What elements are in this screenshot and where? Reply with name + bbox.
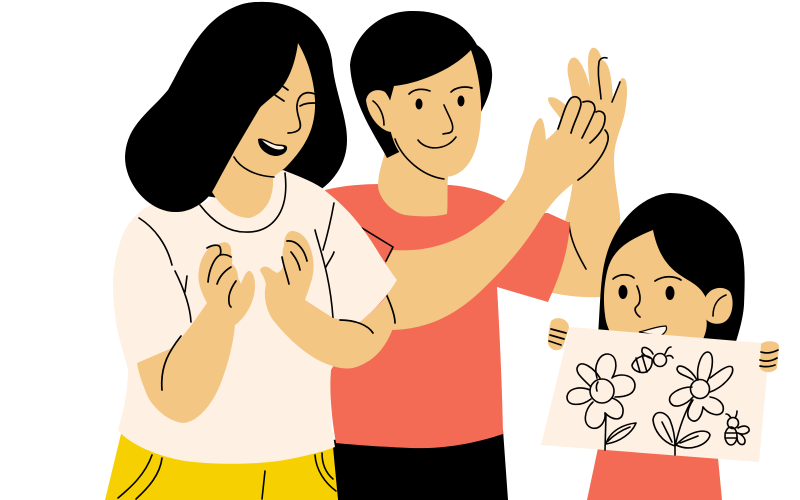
woman's mouth <box>258 138 287 156</box>
woman's front hair <box>125 2 302 212</box>
right flower <box>653 352 733 455</box>
woman's eyes <box>275 85 288 101</box>
woman's back hair <box>200 2 347 200</box>
man's neck <box>378 130 448 216</box>
man's eyebrow <box>451 87 472 92</box>
girl's right thumb <box>760 341 779 372</box>
girl's mouth <box>639 326 667 336</box>
girl's nose <box>635 286 640 317</box>
girl's ear <box>702 288 733 324</box>
girl's dress <box>587 448 722 500</box>
man's jaw line <box>395 139 444 179</box>
man's eyebrows <box>409 89 430 94</box>
shirt collar <box>200 173 286 232</box>
man's pants <box>330 430 508 500</box>
man's sleeve line <box>362 228 393 261</box>
left flower <box>567 354 636 450</box>
man's smile <box>418 137 456 148</box>
shirt sleeve folds <box>139 218 172 265</box>
man's raised arm and hand <box>548 48 627 297</box>
man's left eye <box>416 98 422 110</box>
girl's right eyebrow <box>655 277 681 281</box>
bottom bee <box>725 411 749 445</box>
woman's shorts <box>105 434 338 500</box>
top bee <box>632 347 673 373</box>
girl's left eye <box>618 285 628 299</box>
man's nose <box>443 105 453 134</box>
woman's shirt <box>113 170 397 464</box>
woman's teeth <box>262 140 284 150</box>
woman's left arm and hand <box>137 242 255 423</box>
man's ear <box>366 90 393 132</box>
girl's right eye <box>666 286 674 300</box>
woman's eye right <box>288 93 315 133</box>
man's face <box>366 50 481 179</box>
man's right eye <box>458 96 464 106</box>
man's front arm and hand <box>386 97 608 330</box>
girl's face <box>604 230 733 345</box>
girl's left thumb <box>548 318 569 350</box>
girl's left eyebrow <box>613 275 634 279</box>
drawing paper <box>541 327 767 462</box>
girl's hair <box>598 193 745 345</box>
woman's right arm and hand <box>260 231 395 368</box>
man's shirt <box>325 184 570 448</box>
man's hair <box>350 11 492 158</box>
woman's face and neck <box>125 2 315 218</box>
woman's chin line <box>234 157 274 177</box>
